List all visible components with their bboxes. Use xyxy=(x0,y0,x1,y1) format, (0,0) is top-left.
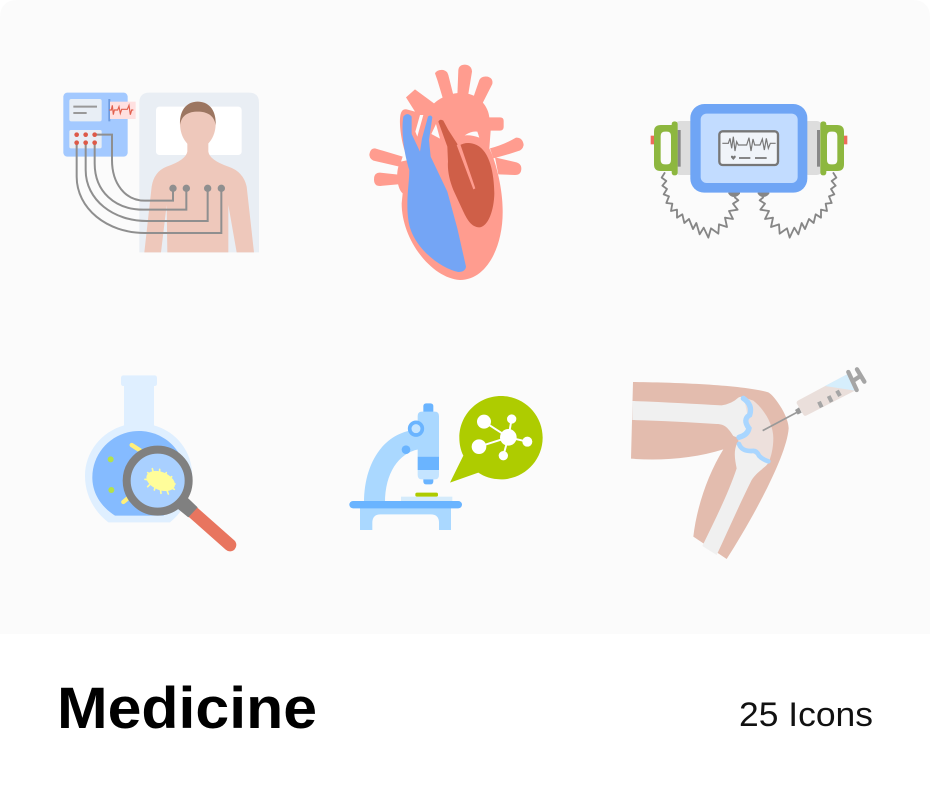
needle xyxy=(763,412,798,431)
blue chamber xyxy=(403,114,466,272)
device casing xyxy=(690,104,807,193)
patient body xyxy=(144,143,254,252)
left paddle tab xyxy=(651,136,655,144)
display ECG trace xyxy=(722,137,776,151)
magnifier handle xyxy=(192,512,230,545)
sample slide xyxy=(415,493,438,497)
femur xyxy=(632,397,748,437)
bottom left plug xyxy=(728,192,740,197)
leg flesh xyxy=(631,382,789,559)
icon: flask under magnifier xyxy=(85,375,230,545)
needle hub xyxy=(795,407,802,415)
tibia xyxy=(702,443,769,555)
stage xyxy=(401,497,452,502)
table top xyxy=(349,501,462,508)
gaps between vessels xyxy=(415,115,479,139)
display heart xyxy=(731,156,736,160)
right paddle tab xyxy=(843,136,847,144)
device inner panel xyxy=(701,114,798,183)
left paddle bar xyxy=(678,130,681,167)
right paddle xyxy=(820,121,844,175)
display dashes xyxy=(739,155,767,160)
heart body xyxy=(397,89,504,280)
icon count: 25 Icons xyxy=(739,696,873,734)
tube xyxy=(418,412,439,457)
right paddle bar xyxy=(817,130,820,167)
microscope arm xyxy=(364,429,418,503)
base legs xyxy=(360,507,451,530)
wires xyxy=(662,172,836,238)
ECG trace xyxy=(109,105,133,115)
icon: defibrillator xyxy=(651,104,847,238)
dark red chamber xyxy=(438,120,494,227)
septum slit xyxy=(457,143,475,189)
green dot upper xyxy=(108,456,114,462)
display xyxy=(719,131,778,165)
monitor text screen xyxy=(69,99,102,121)
speech bubble xyxy=(450,396,543,483)
ECG strip handle xyxy=(108,99,110,121)
lower bacterium xyxy=(123,497,129,502)
magnifier neck xyxy=(174,495,198,517)
bottom right plug xyxy=(758,192,769,197)
upper bacterium xyxy=(132,445,141,451)
side connectors xyxy=(675,121,695,175)
tube lower xyxy=(418,470,439,479)
ECG wires xyxy=(77,135,221,233)
green dot lower xyxy=(108,487,114,493)
icon: microscope with molecule bubble xyxy=(349,396,543,530)
tibia cartilage xyxy=(739,444,768,461)
magnified bacterium xyxy=(143,467,178,495)
screen lines xyxy=(73,107,97,113)
icon: patient with ECG monitor xyxy=(63,93,259,252)
magnifier lens xyxy=(127,450,189,512)
icon: knee injection xyxy=(631,369,864,559)
small knob xyxy=(402,445,410,454)
syringe ticks xyxy=(819,391,840,407)
patient head xyxy=(180,102,216,148)
monitor xyxy=(63,93,128,157)
heart vessels xyxy=(369,65,524,186)
port dots xyxy=(74,132,97,145)
flask liquid xyxy=(92,431,186,516)
syringe empty section xyxy=(825,374,855,391)
femur cartilage xyxy=(739,398,751,437)
syringe barrel xyxy=(797,374,855,416)
pillow xyxy=(156,107,242,155)
electrodes xyxy=(169,185,225,192)
title: Medicine xyxy=(57,676,317,741)
bacterium spikes xyxy=(145,469,175,494)
right side connector xyxy=(803,121,822,175)
left paddle xyxy=(654,121,678,175)
molecule xyxy=(472,414,532,460)
syringe plunger xyxy=(848,369,864,390)
tube band xyxy=(418,457,439,470)
ECG strip xyxy=(110,102,136,119)
bed xyxy=(139,93,259,252)
patient hair xyxy=(180,102,216,125)
connector port panel xyxy=(69,130,102,148)
joint capsule xyxy=(738,397,773,463)
focus knob xyxy=(410,422,422,435)
objective lens xyxy=(423,479,433,484)
eyepiece xyxy=(423,403,433,414)
flask xyxy=(85,375,192,522)
icon: heart anatomy xyxy=(369,65,524,280)
